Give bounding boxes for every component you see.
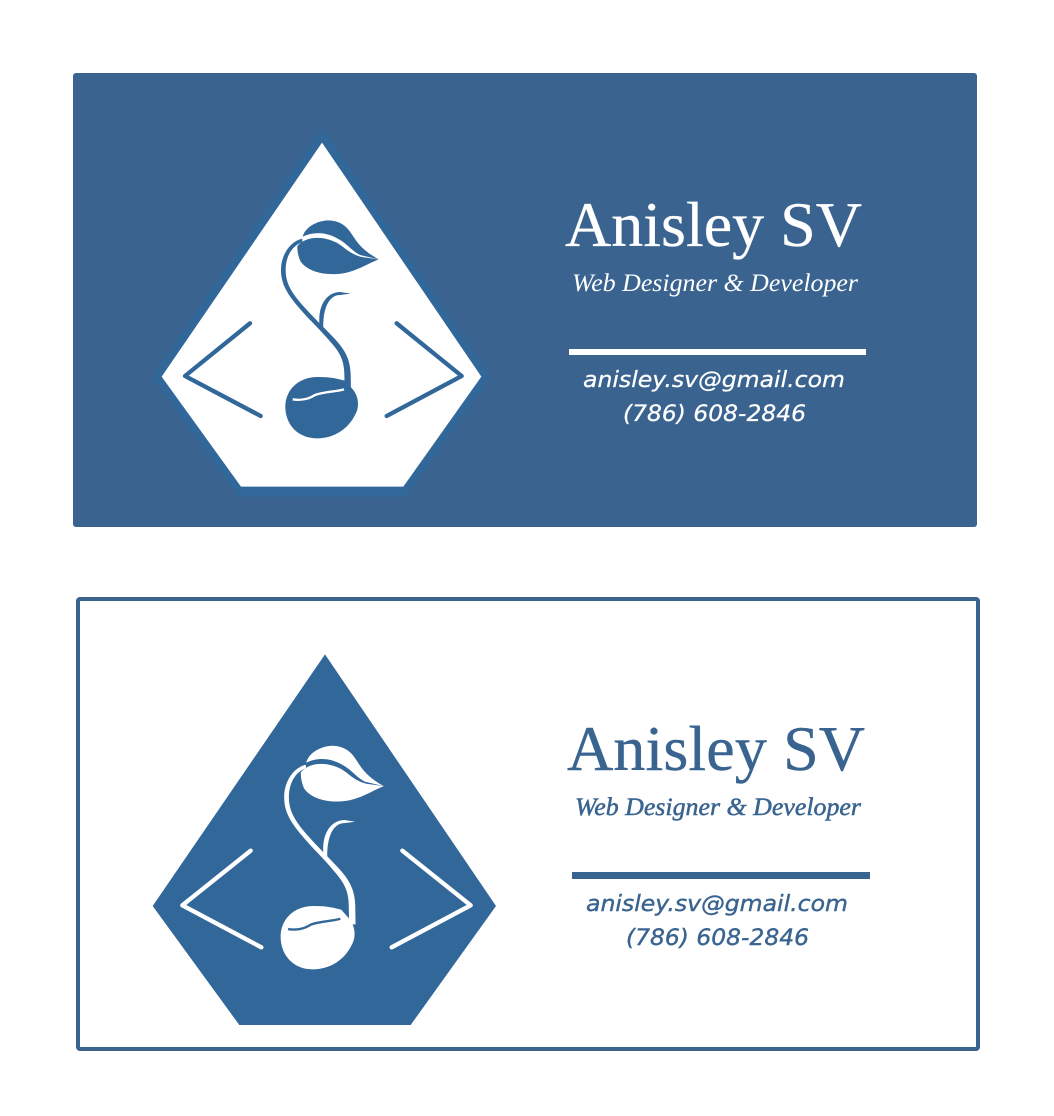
icon: right code bracket: [392, 851, 471, 947]
divider rule: [569, 349, 866, 355]
logo: pentagon with sprout, white on blue: [155, 132, 487, 494]
name heading: Anisley SV: [565, 189, 862, 260]
icon: sprout: [281, 220, 379, 438]
name heading: Anisley SV: [567, 713, 865, 784]
email: anisley.sv@gmail.com: [586, 892, 848, 917]
icon: sprout: [281, 746, 384, 969]
logo pentagon outline: [155, 132, 487, 494]
logo: pentagon with sprout, blue on white: [153, 654, 496, 1025]
phone: (786) 608-2846: [626, 926, 809, 951]
job title: Web Designer & Developer: [575, 794, 861, 821]
job title: Web Designer & Developer: [572, 270, 858, 297]
panel: dark business card: [73, 73, 977, 527]
card background: [73, 73, 977, 527]
icon: left code bracket: [185, 323, 261, 416]
email: anisley.sv@gmail.com: [583, 368, 845, 393]
panel: light business card: [78, 599, 978, 1049]
divider rule: [572, 872, 870, 879]
icon: left code bracket: [182, 851, 261, 947]
icon: right code bracket: [387, 323, 462, 416]
logo pentagon: [162, 143, 481, 487]
card outline: [78, 599, 978, 1049]
logo pentagon: [153, 654, 496, 1025]
phone: (786) 608-2846: [623, 402, 806, 427]
